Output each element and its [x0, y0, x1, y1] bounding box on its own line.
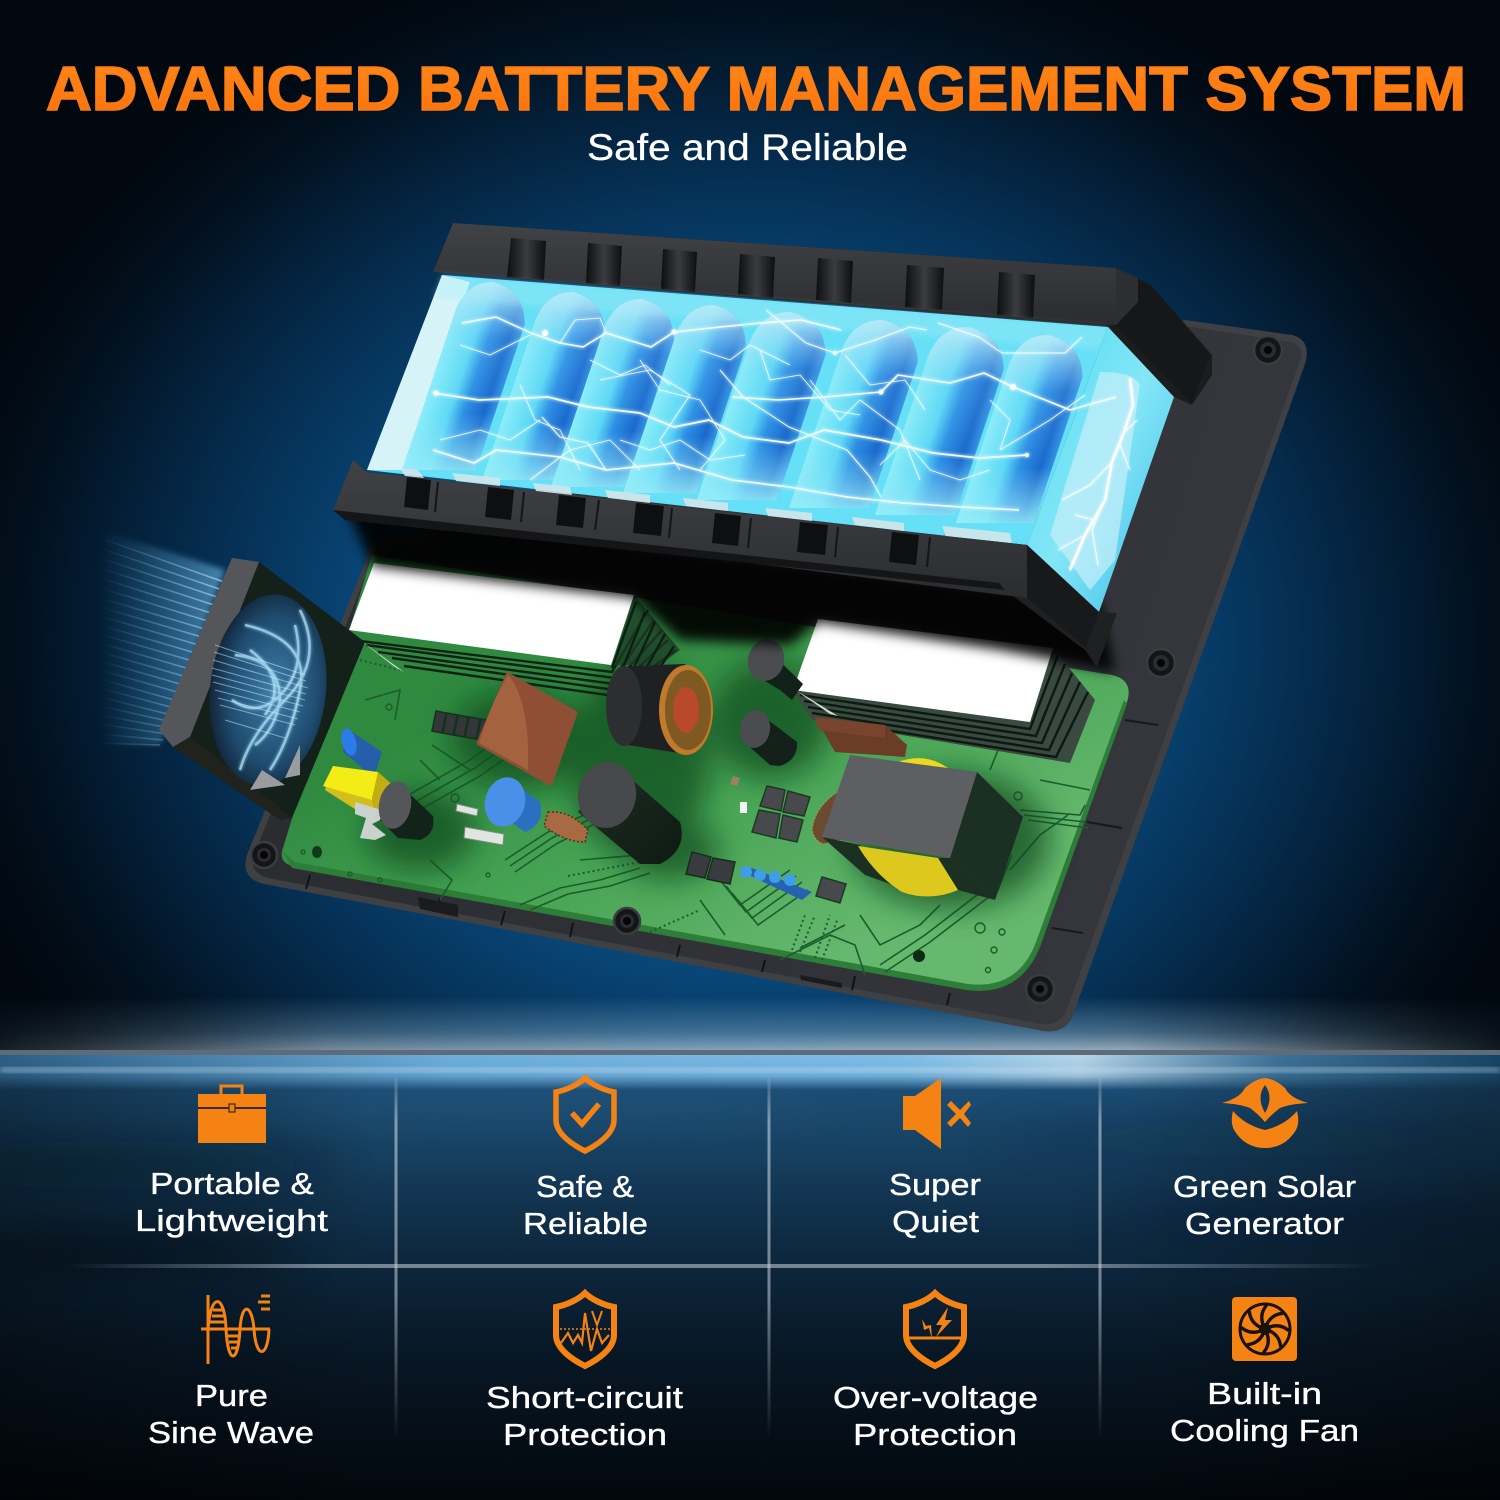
label: Short-circuit	[486, 1380, 683, 1415]
right heat sink body	[793, 648, 1095, 763]
feature: built-in cooling fan	[1170, 1297, 1359, 1448]
electronic components	[323, 635, 1023, 903]
small square chip	[816, 877, 846, 903]
feature: portable and lightweight	[135, 1086, 328, 1238]
lightning hot spots	[434, 330, 1029, 457]
yellow coil bottom	[858, 846, 958, 897]
two dark ICs	[686, 852, 735, 884]
black capacitor	[375, 779, 433, 840]
feature: green solar generator	[1173, 1078, 1356, 1241]
label: Generator	[1185, 1206, 1344, 1241]
label: Safe &	[536, 1169, 634, 1204]
battery front glass	[367, 275, 1108, 545]
battery pack	[333, 223, 1212, 667]
label	[1173, 1169, 1356, 1241]
label: Protection	[853, 1417, 1017, 1452]
cooling fan	[100, 530, 365, 820]
circuit traces	[365, 690, 1090, 975]
heat sinks	[349, 563, 1095, 763]
label	[135, 1166, 328, 1238]
black toroid choke	[606, 664, 713, 755]
right heat sink top	[793, 619, 1053, 722]
white terminal	[355, 802, 386, 840]
top frame	[433, 223, 1212, 405]
feature: short-circuit protection	[486, 1293, 683, 1452]
label: Portable &	[150, 1166, 314, 1201]
component shadows	[365, 660, 1050, 910]
battery cells	[402, 275, 1108, 523]
icon: shield voltage spike	[556, 1293, 614, 1366]
fan housing side	[159, 558, 259, 747]
label: Lightweight	[135, 1203, 328, 1238]
tiny SMDs	[730, 776, 747, 813]
battery left highlight	[367, 275, 470, 470]
left heat sink fins	[352, 610, 676, 696]
upper right capacitor	[743, 635, 803, 700]
brown capacitor	[479, 675, 575, 783]
label	[833, 1380, 1038, 1452]
lightning arcs	[433, 310, 1116, 510]
housing plate	[245, 320, 1307, 1032]
yellow coil top	[898, 758, 948, 768]
dark IC row	[432, 711, 490, 741]
grid dividers	[65, 1078, 1375, 1440]
feature: pure sine wave	[148, 1295, 314, 1450]
small brown block	[815, 717, 907, 757]
mounting screws	[251, 336, 1282, 1003]
icon: shield check	[556, 1078, 614, 1151]
icon: muted speaker	[903, 1078, 971, 1149]
cell end tabs	[400, 468, 1012, 543]
label: Reliable	[523, 1206, 648, 1241]
blue capacitor small	[339, 727, 382, 778]
label: Green Solar	[1173, 1169, 1356, 1204]
fan housing face	[190, 562, 365, 818]
feature: super quiet	[889, 1078, 981, 1239]
label: Super	[889, 1167, 981, 1202]
large black capacitor	[573, 757, 682, 864]
top slots	[507, 238, 1035, 318]
label: Pure	[195, 1378, 268, 1413]
fan swirl	[200, 588, 336, 792]
blue capacitor large	[479, 773, 541, 832]
icon: fan	[1232, 1297, 1297, 1361]
four grey chips	[752, 786, 810, 842]
left heat sink top	[349, 563, 634, 665]
subtitle: Safe and Reliable	[587, 127, 908, 168]
icon: shield lightning	[906, 1293, 964, 1366]
shadow under battery frame	[345, 505, 1115, 672]
lower capacitor	[737, 708, 797, 766]
label	[889, 1167, 981, 1239]
feature: over-voltage protection	[833, 1293, 1038, 1452]
bottom frame	[333, 460, 1117, 667]
label: Quiet	[892, 1204, 979, 1239]
feature: safe and reliable	[523, 1078, 648, 1241]
bottom slots	[404, 477, 919, 565]
label: Over-voltage	[833, 1380, 1038, 1415]
label: Cooling Fan	[1170, 1413, 1359, 1448]
white SMD connectors	[456, 804, 504, 845]
icon: briefcase	[198, 1086, 266, 1143]
air streaks	[100, 530, 225, 745]
label	[486, 1380, 683, 1452]
battery side glass	[1027, 327, 1174, 612]
circuit board	[282, 555, 1129, 991]
copper coil	[544, 812, 588, 842]
latch tabs	[418, 897, 842, 988]
label	[1170, 1376, 1359, 1448]
product illustration: BMS inverter board	[100, 223, 1307, 1032]
label: Built-in	[1207, 1376, 1322, 1411]
icon: sine wave	[201, 1295, 270, 1364]
title: ADVANCED BATTERY MANAGEMENT SYSTEM	[46, 55, 1466, 124]
icon: leaf and sun	[1222, 1078, 1308, 1148]
label	[523, 1169, 648, 1241]
four blue pins	[740, 866, 812, 900]
label: Protection	[503, 1417, 667, 1452]
yellow relay block	[323, 766, 396, 820]
copper coil right	[812, 790, 845, 844]
label: Sine Wave	[148, 1415, 314, 1450]
label	[148, 1378, 314, 1450]
grey transformer	[822, 755, 1023, 900]
